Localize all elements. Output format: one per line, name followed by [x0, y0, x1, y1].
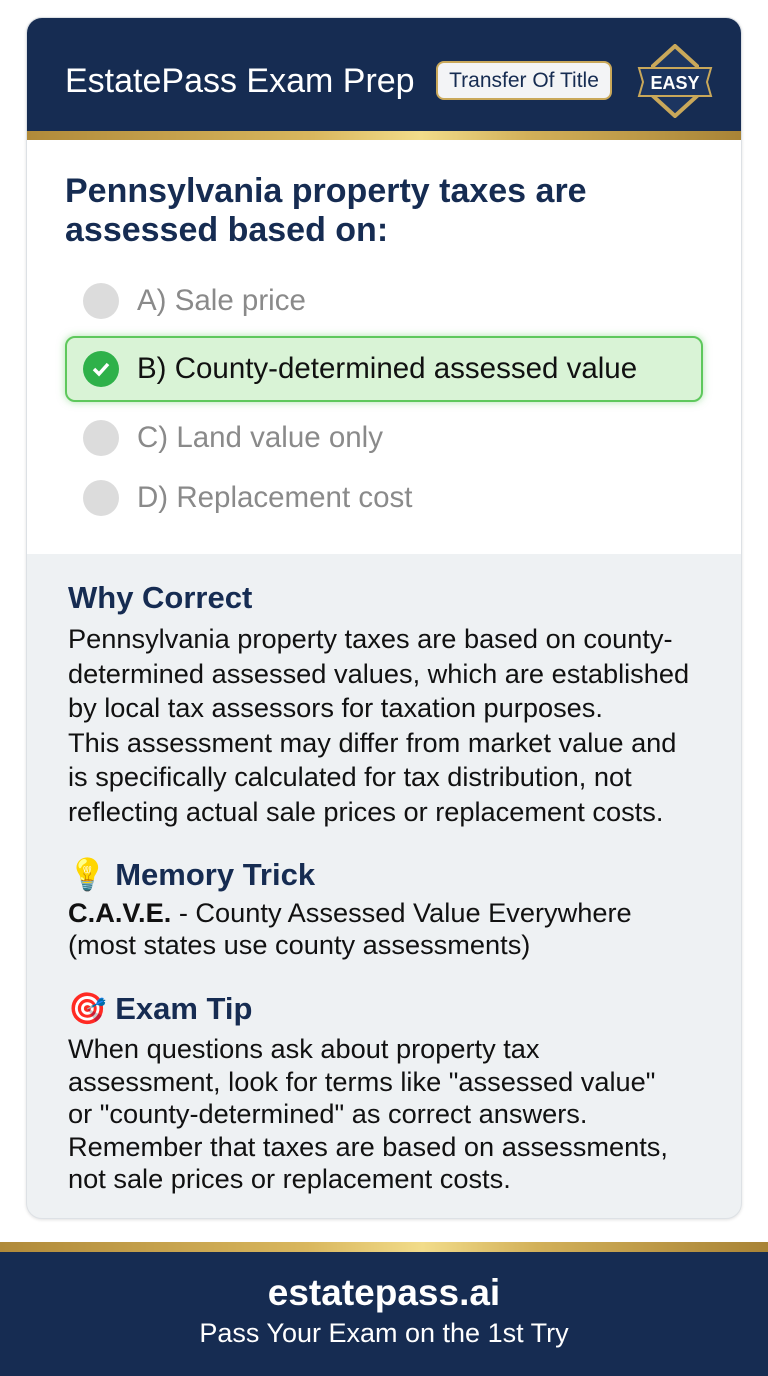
- explanation: why correct: This assessment may differ from market value and: [68, 726, 676, 758]
- explanation: why correct: by local tax assessors for taxation purposes.: [68, 692, 603, 723]
- exam tip: When questions ask about property tax: [68, 1033, 540, 1064]
- header: [27, 18, 743, 131]
- explanation: why correct: [68, 580, 689, 826]
- memory trick: C.A.V.E. - County Assessed Value Everywhere: [68, 897, 632, 928]
- explanation: why correct: Pennsylvania property taxes are based on county-: [68, 623, 673, 654]
- question: [65, 172, 587, 249]
- option A: A) Sale price: [137, 284, 306, 317]
- memory trick: [68, 857, 632, 960]
- memory trick: 💡 Memory Trick: [68, 857, 315, 892]
- footer: [0, 1252, 768, 1376]
- footer tagline: Pass Your Exam on the 1st Try: [199, 1318, 569, 1348]
- category pill: Transfer Of Title: [449, 68, 599, 92]
- question section: [27, 140, 743, 554]
- explanation: why correct: Why Correct: [68, 580, 252, 615]
- exam tip: 🎯 Exam Tip: [68, 991, 252, 1026]
- exam tip: not sale prices or replacement costs.: [68, 1163, 511, 1194]
- option B correct: B) County-determined assessed value: [137, 352, 637, 385]
- explanation: why correct: reflecting actual sale prices or replacement costs.: [68, 796, 663, 826]
- option C: C) Land value only: [137, 421, 383, 454]
- brand title: EstatePass Exam Prep: [65, 62, 415, 100]
- option B correct: [65, 336, 703, 402]
- difficulty badge: EASY: [650, 73, 700, 93]
- option A: [83, 283, 306, 319]
- category pill: [436, 61, 612, 100]
- exam tip: Remember that taxes are based on assessments,: [68, 1130, 668, 1162]
- question: assessed based on:: [65, 211, 388, 249]
- question: Pennsylvania property taxes are: [65, 172, 587, 210]
- option D: D) Replacement cost: [137, 481, 412, 514]
- exam tip: or "county-determined" as correct answers.: [68, 1098, 587, 1129]
- explanation: why correct: determined assessed values, which are established: [68, 658, 689, 688]
- memory trick: (most states use county assessments): [68, 929, 530, 960]
- exam tip: assessment, look for terms like "assessed value": [68, 1066, 655, 1096]
- exam tip: [68, 991, 668, 1194]
- footer site: estatepass.ai: [268, 1272, 500, 1313]
- difficulty badge: [638, 44, 712, 118]
- explanation: why correct: is specifically calculated for tax distribution, not: [68, 761, 632, 792]
